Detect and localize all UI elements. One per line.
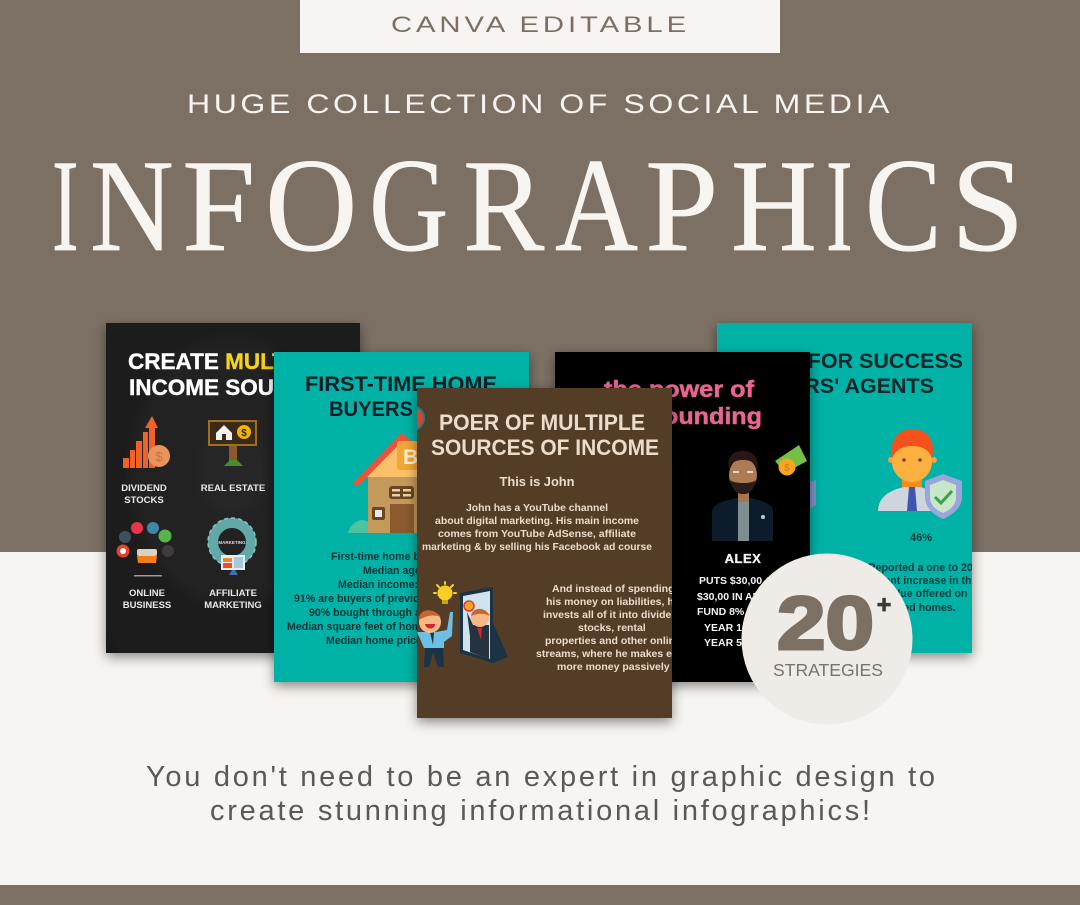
card title: POER OF MULTIPLE [439,410,645,435]
badge: 20+ strategies: 20 [777,581,874,665]
title: infographics: C [865,132,942,280]
body text: PUTS $30,00 A MONTH [699,575,813,587]
title: infographics: F [182,132,255,279]
icon: money: $ [784,463,790,474]
body text: $30,00 IN AN INDEX [697,591,795,603]
card: the power of compounding [555,352,813,682]
body text: 91% are buyers of previously owned homes [294,593,514,605]
card title: SOURCES OF INCOME [431,435,659,460]
illustration: man and mirror [417,582,508,667]
title: infographics: I [826,133,853,279]
label: affiliate marketing [204,590,262,608]
icon: alex portrait [712,451,773,541]
card title: FIRST-TIME HOME [305,373,497,396]
card title [604,380,761,430]
card: needed for success [712,323,978,653]
card title: INCOME SOURCES [129,375,337,400]
icon: dividend stocks: $ [155,449,163,464]
body text: Median home price: $240,000 [326,635,473,647]
icon: dividend stocks [123,416,170,468]
body text: intro: John has a YouTube channel [466,502,608,514]
card title [128,353,274,396]
badge: 20+ strategies [742,554,912,724]
banner: canva editable: CANVA EDITABLE [391,12,690,37]
body text: YEAR 10 [704,622,748,634]
body text: intro: comes from YouTube AdSense, affiliate [438,528,636,540]
card: create multiple income sources [106,323,360,653]
card title [810,354,962,393]
body text: details: And instead of spending [552,583,674,595]
badge: 20+ strategies: STRATEGIES [773,660,883,680]
title: infographics: O [265,131,357,280]
body text: intro: about digital marketing. His main income [435,515,639,527]
body text: First-time home buyers: 33% [331,551,476,563]
label: real estate: REAL ESTATE [201,483,265,494]
body text: percent increase in the [862,575,978,587]
body text: Median square feet of home: 1,700 [287,621,460,633]
title: infographics: I [52,133,79,279]
tagline: create stunning informational infographics! [210,795,870,827]
tagline [146,761,935,827]
body text: 90% bought through an agent [309,607,459,619]
title: infographics [52,130,1024,280]
body text: intro [422,502,652,553]
title: infographics: G [369,131,448,280]
card title: BUYERS [329,398,413,421]
icon: money [775,445,807,476]
icon: affiliate marketing [208,518,256,575]
label: online business: BUSINESS [123,600,171,611]
body text: details: streams, where he makes even [536,648,690,660]
body text [868,563,972,611]
icon: house: B [403,446,418,469]
title: infographics: A [555,132,638,280]
body text [288,552,417,646]
subheading: This is John [500,474,575,489]
card title [432,414,658,455]
body text: FUND 8% RETURN [697,606,791,618]
body text: intro: marketing & by selling his Facebook ad course [422,541,652,553]
icon: ring fragment [417,406,425,430]
icon: real estate sign: $ [241,428,247,439]
body text: details: stocks, rental [578,622,646,634]
card: power of multiple sources of income [400,388,690,718]
body text: listed homes. [888,602,956,614]
icon: house [348,432,417,533]
badge: 20+ strategies: + [877,591,891,619]
card title: BUYERS' AGENTS [745,374,934,398]
label: dividend stocks: DIVIDEND [121,483,167,494]
body text: Reported a one to 20 [868,562,973,574]
label: dividend stocks [122,484,166,503]
stat: 46%: 46% [910,532,932,544]
title: infographics: R [463,134,545,279]
label: online business [123,590,171,608]
body text: details [536,584,672,672]
body text: details: his money on liabilities, he [546,596,680,608]
banner: canva editable [300,0,780,53]
icon: real estate sign [209,421,256,466]
card title: compounding [596,403,762,429]
card title: CREATE MULTIPLE [128,349,336,374]
body text: details: invests all of it into dividend [543,609,684,621]
body text: Median income: $80,000 [338,579,459,591]
title: infographics: H [731,133,817,279]
card title: NEEDED FOR SUCCESS [712,349,963,373]
card: first-time home buyers [274,352,529,682]
icon: agent with shield [808,429,962,519]
title: infographics: N [90,132,174,279]
label: dividend stocks: STOCKS [124,495,164,506]
tagline: You don't need to be an expert in graphic design to [146,761,935,793]
card title [306,376,496,416]
label: affiliate marketing: MARKETING [204,600,262,611]
subtitle: HUGE COLLECTION OF SOCIAL MEDIA [187,89,893,119]
body text: Median age: 33 [363,565,439,577]
icon: online business [116,522,174,576]
name: alex: ALEX [725,551,761,566]
body text: details: more money passively [557,661,670,673]
label: affiliate marketing: AFFILIATE [209,588,257,599]
title: infographics: P [645,132,718,279]
label: online business: ONLINE [129,588,165,599]
title: infographics: S [951,130,1024,279]
card title: the power of [604,376,754,402]
body text: details: properties and other online [545,635,681,647]
body text [697,576,768,646]
body text: YEAR 50 [704,637,748,649]
body text: sale value offered on [862,588,967,600]
icon: affiliate marketing: MARKETING [218,540,246,545]
